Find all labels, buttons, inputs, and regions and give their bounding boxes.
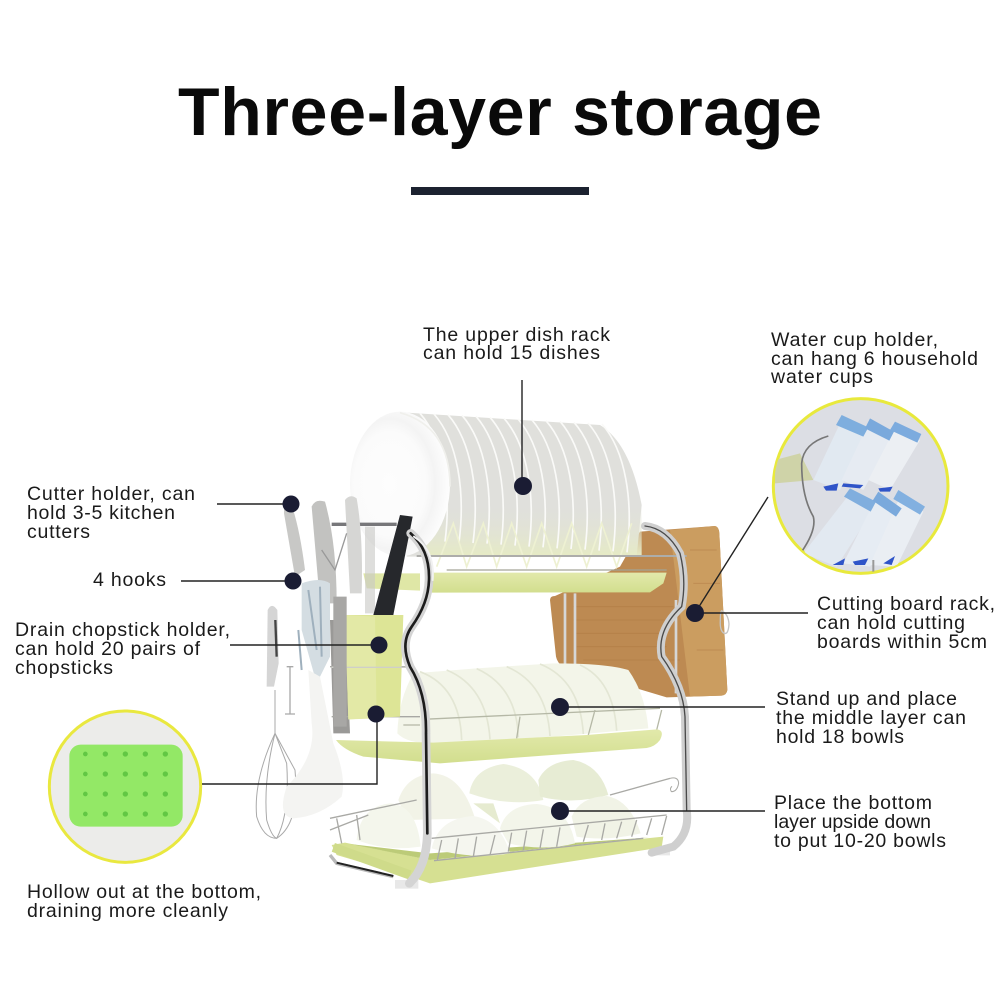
- tray feet: [395, 850, 670, 889]
- label: hollow bottom: Hollow out at the bottom,: [27, 881, 261, 903]
- knives: [284, 496, 362, 727]
- label: cutter holder: [27, 483, 195, 543]
- label: cutter holder: cutters: [27, 521, 90, 543]
- label: chopstick holder: chopsticks: [15, 657, 113, 679]
- marker dots: [282, 477, 704, 820]
- callout circle: hollow bottom: [49, 711, 201, 862]
- label: chopstick holder: [15, 619, 230, 679]
- label: middle layer: hold 18 bowls: [776, 726, 904, 748]
- bowls: [357, 760, 641, 856]
- label: cutting board rack: [817, 593, 995, 653]
- label: bottom layer: Place the bottom: [774, 792, 932, 814]
- upper drip tray: [432, 573, 667, 593]
- label: cutting board rack: boards within 5cm: [817, 631, 987, 653]
- dishes: upper layer: [350, 412, 642, 557]
- kitchen utensils: knives, hooks, whisk and spoon: [49, 496, 362, 862]
- wire basket: [330, 778, 670, 861]
- label: upper dish rack: [423, 324, 610, 364]
- middle drip tray: [336, 729, 662, 763]
- title underline: [411, 187, 589, 195]
- back support rods: [565, 593, 676, 693]
- base rail: [330, 855, 393, 877]
- whisk: [256, 690, 296, 838]
- label: upper dish rack: can hold 15 dishes: [423, 342, 600, 364]
- label: chopstick holder: Drain chopstick holder,: [15, 619, 230, 641]
- upper wire rack: [417, 523, 687, 570]
- label: hollow bottom: draining more cleanly: [27, 900, 228, 922]
- label: water cup holder: water cups: [770, 366, 873, 388]
- label: bottom layer: layer upside down: [774, 811, 931, 833]
- label: bottom layer: [774, 792, 946, 852]
- label: bottom layer: to put 10-20 bowls: [774, 830, 946, 852]
- knife holder frame: [330, 523, 420, 733]
- chopstick holder: [332, 615, 407, 719]
- ladle handle: [267, 606, 279, 687]
- label: water cup holder: [770, 329, 978, 388]
- chrome frame: [405, 526, 687, 883]
- label: middle layer: [776, 688, 966, 748]
- chrome frame right: [645, 526, 687, 853]
- label: chopstick holder: can hold 20 pairs of: [15, 638, 201, 660]
- chopsticks: [373, 515, 413, 615]
- title: Three-layer storage: [178, 74, 822, 150]
- hook: [285, 667, 295, 714]
- label: middle layer: the middle layer can: [776, 707, 966, 729]
- bottom tray: [332, 837, 663, 883]
- cutting board: [550, 526, 729, 697]
- label: upper dish rack: The upper dish rack: [423, 324, 610, 346]
- label: hollow bottom: [27, 881, 261, 922]
- label: cutter holder: Cutter holder, can: [27, 483, 195, 505]
- label: middle layer: Stand up and place: [776, 688, 957, 710]
- label: cutting board rack: can hold cutting: [817, 612, 965, 634]
- label: water cup holder: can hang 6 household: [771, 348, 978, 370]
- callout circle: water cups: [773, 399, 948, 577]
- hanging towel: [302, 580, 330, 683]
- label: cutting board rack: Cutting board rack,: [817, 593, 995, 615]
- bowls, basket and tray: bottom layer: [330, 760, 679, 889]
- label: hooks: 4 hooks: [93, 569, 166, 591]
- leader lines: [181, 380, 808, 811]
- label: water cup holder: Water cup holder,: [771, 329, 938, 351]
- label: cutter holder: hold 3-5 kitchen: [27, 502, 175, 524]
- bowls: middle layer: [397, 663, 662, 743]
- spoon: [283, 670, 343, 818]
- illustration: three-layer dish rack: [330, 412, 729, 763]
- chrome frame left: [405, 533, 433, 883]
